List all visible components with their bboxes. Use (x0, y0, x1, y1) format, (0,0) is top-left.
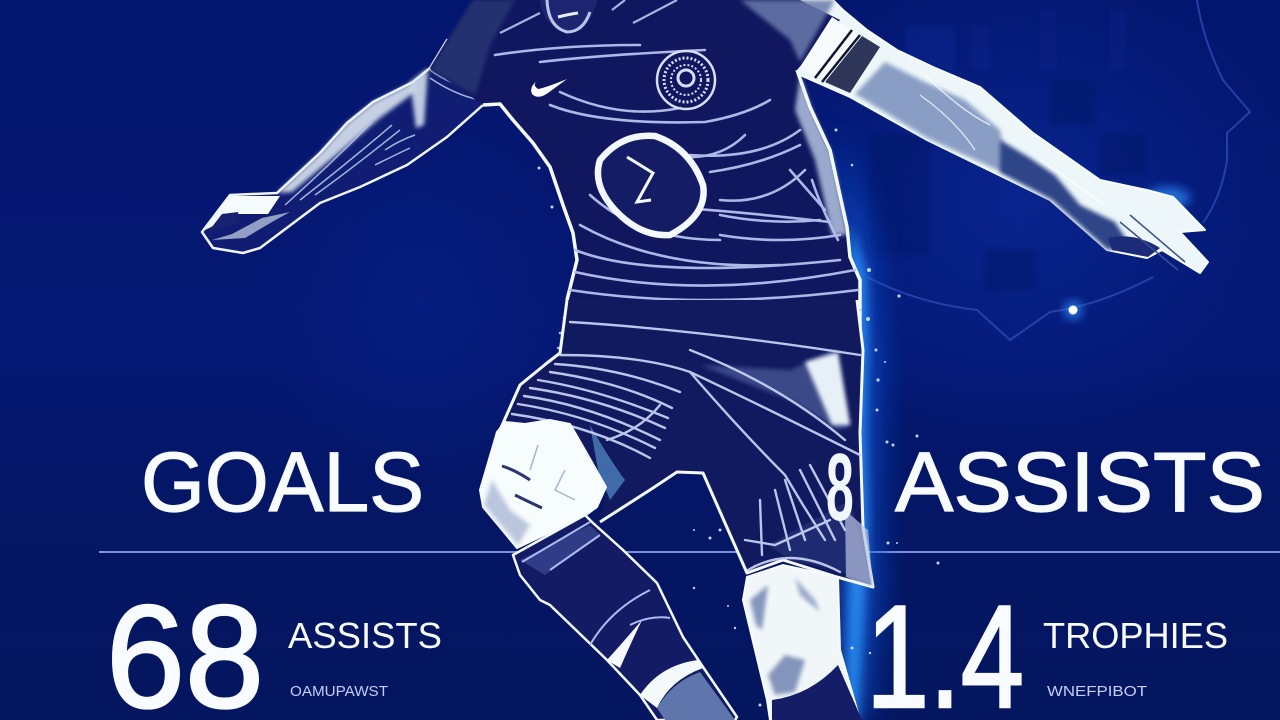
faint club crest behind player (867, 0, 1250, 340)
ankle band (640, 660, 703, 708)
stat heading: assists: ASSISTS (895, 435, 1265, 529)
captain's armband (800, 17, 880, 93)
sparkles (538, 128, 1078, 706)
swoosh logo (531, 79, 567, 97)
shorts (500, 300, 873, 587)
shorts number: 8 (826, 435, 854, 541)
sock (513, 515, 737, 720)
assists label: ASSISTS (288, 615, 442, 656)
divider rule (99, 551, 1280, 553)
player illustration (202, 0, 1208, 720)
torso and jersey (430, 0, 880, 380)
head and collar (500, 0, 677, 33)
trophies sublabel: WNEFPIBOT (1047, 683, 1147, 700)
shorts fold lines (512, 322, 860, 572)
blue energy glow around player (835, 130, 1190, 720)
right arm (780, 0, 1208, 273)
trophies label: TROPHIES (1043, 615, 1228, 656)
left arm (202, 40, 520, 253)
assists sublabel: OAMUPAWST (290, 683, 388, 700)
chest crest (657, 51, 715, 109)
back leg (743, 565, 862, 720)
knee (480, 420, 606, 548)
stat heading: goals: GOALS (141, 435, 424, 529)
sponsor badge (598, 136, 704, 235)
front leg (480, 420, 737, 720)
sock stripe (607, 620, 642, 668)
jersey fold lines (495, 45, 862, 358)
